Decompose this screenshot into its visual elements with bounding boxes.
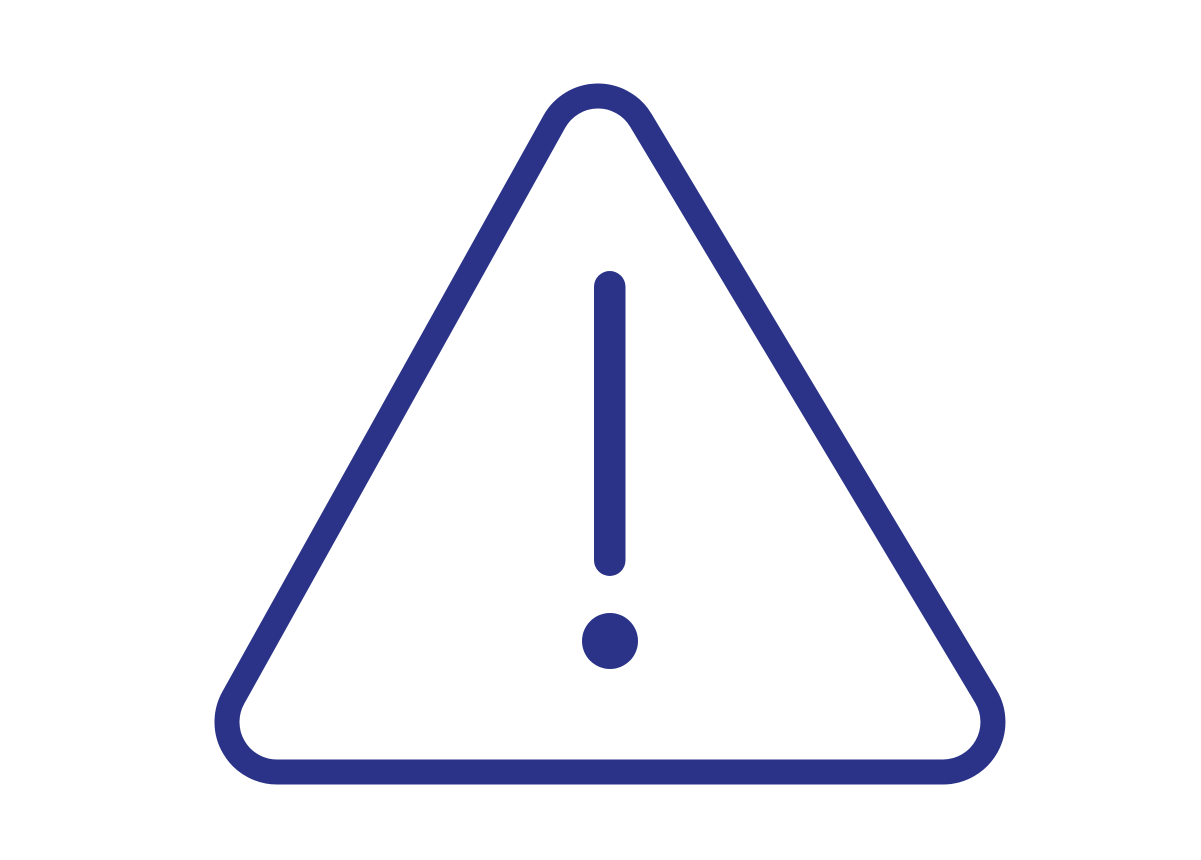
exclamation bar [594, 271, 626, 576]
exclamation dot [582, 613, 638, 669]
triangle outline [227, 96, 993, 772]
